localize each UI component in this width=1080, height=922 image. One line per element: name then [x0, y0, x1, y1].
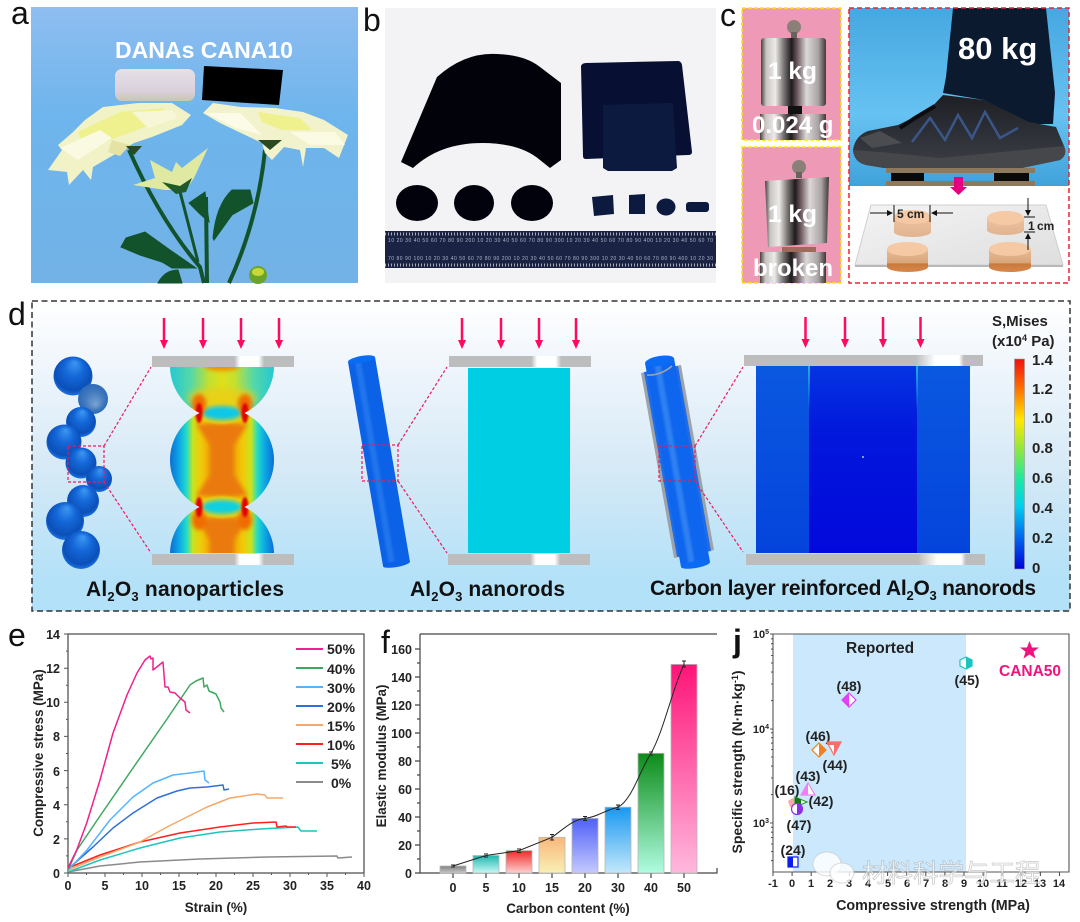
caption nanorods: Al: [410, 578, 431, 601]
y axis title j: ): [729, 670, 745, 675]
x tick labels j: 1: [808, 878, 814, 890]
y tick labels f: 160: [391, 643, 412, 657]
panel d: finite element stress simulations: [32, 301, 1070, 611]
x tick labels j: 11: [996, 878, 1008, 890]
label broken: broken: [753, 255, 833, 282]
stems and leaves: [121, 150, 265, 283]
bars f: [440, 664, 697, 873]
y tick labels f: 60: [398, 783, 412, 797]
panel label f: f: [381, 624, 390, 660]
x axis title f: Carbon content (%): [506, 901, 630, 916]
stress colour bar: 1.2: [1032, 381, 1053, 398]
y tick labels f: [391, 643, 412, 881]
x tick labels j: 13: [1034, 878, 1046, 890]
magenta arrow: [950, 177, 967, 195]
nanoparticle stress map: [170, 367, 274, 553]
left flower: [48, 103, 191, 185]
y tick labels e: 2: [53, 833, 60, 847]
y tick labels j: 5: [765, 629, 769, 636]
legend e: 15%: [327, 718, 356, 734]
legend e: 20%: [327, 699, 356, 715]
round samples: [396, 185, 553, 221]
y tick labels f: 40: [398, 811, 412, 825]
x tick labels j: 12: [1015, 878, 1027, 890]
y axis title j: Specific strength (N·m·kg: [729, 683, 745, 854]
dimension 1 cm: [1024, 198, 1054, 250]
x tick labels j: 8: [942, 878, 948, 890]
carbon coated nanorod: [641, 354, 714, 570]
stress colour bar: [992, 313, 1055, 577]
marker 45: (45): [955, 672, 979, 688]
x tick labels e: [65, 879, 371, 893]
glass plate schematic: [855, 205, 1063, 265]
y tick labels e: 12: [46, 662, 60, 676]
sample names: DANAs CANA10: [115, 37, 293, 63]
y tick labels f: 100: [391, 727, 412, 741]
panel c: 1 kg weight on sample: [742, 8, 841, 140]
watermark text: 材料科学与工程: [862, 860, 1041, 888]
label sample mass: 0.024 g: [752, 112, 833, 139]
small flower: [133, 148, 208, 194]
marker 16: (16): [775, 782, 799, 798]
compression plates for coated nanorod: [744, 355, 985, 565]
x axis title j: Compressive strength (MPa): [836, 898, 1030, 914]
marker 44: (44): [823, 757, 847, 773]
x tick labels f: 20: [578, 881, 592, 895]
panel c: weight breaking control sample: [742, 147, 841, 283]
x tick labels j: -1: [768, 878, 778, 890]
x tick labels j: [768, 878, 1066, 890]
y tick labels j: 10: [753, 818, 765, 830]
y tick labels j: 3: [765, 818, 769, 825]
caption nanoparticles: 3: [131, 589, 139, 604]
caption nanorods: O: [439, 578, 455, 601]
caption carbon reinforced nanorods: O: [913, 577, 930, 600]
y tick labels e: 6: [53, 765, 60, 779]
x tick labels f: 10: [512, 881, 526, 895]
legend e: 30%: [327, 680, 356, 696]
legend e: 50%: [327, 641, 356, 657]
stress colour bar: 0.4: [1032, 500, 1054, 517]
large square sample: [581, 61, 692, 159]
x tick labels f: 15: [545, 881, 559, 895]
x tick labels j: 2: [827, 878, 833, 890]
caption nanoparticles: Al: [86, 578, 107, 601]
stress colour bar: 0.6: [1032, 470, 1053, 487]
small square sample: [603, 103, 677, 171]
dimension 1 cm: 1: [1028, 219, 1035, 233]
x tick labels j: 9: [961, 878, 967, 890]
compression plates for nanoparticles: [152, 356, 294, 565]
y tick labels j: 10: [753, 629, 765, 641]
x tick labels j: 0: [789, 878, 795, 890]
x tick labels f: 50: [677, 881, 691, 895]
x tick labels j: 10: [977, 878, 989, 890]
x tick labels f: [450, 881, 691, 895]
marker 44: [823, 742, 847, 773]
shoe: [853, 95, 1065, 168]
axes e: [64, 634, 364, 877]
x tick labels e: 15: [172, 879, 186, 893]
x axis title e: Strain (%): [185, 900, 247, 915]
pressure arrows for nanoparticles: [160, 318, 283, 349]
y tick labels e: [46, 628, 60, 881]
legend e: 0%: [331, 775, 352, 791]
x tick labels e: 30: [283, 879, 297, 893]
reported label: Reported: [846, 640, 914, 657]
x tick labels f: 40: [644, 881, 658, 895]
axes f: [415, 634, 717, 878]
x tick labels j: 3: [846, 878, 852, 890]
peach cylinders: [887, 210, 1031, 272]
x tick labels e: 5: [102, 879, 109, 893]
label 80 kg: 80 kg: [958, 31, 1037, 66]
x tick labels e: 20: [209, 879, 223, 893]
reported region: [793, 634, 966, 872]
marker 48: [837, 678, 861, 707]
y tick labels j: [753, 629, 769, 830]
x tick labels j: 4: [865, 878, 872, 890]
ruler: [385, 231, 716, 268]
ruler: 70 80 90 100 10 20 30 40 50 60 70 80 90 200 10 20 30 40 50 60 70 80 90 300 10 20 30 40 50 60 70 80 90 400 10 20 30: [388, 256, 713, 262]
y tick labels e: 8: [53, 730, 60, 744]
y tick labels f: 20: [398, 839, 412, 853]
panel f: elastic modulus bar chart: [374, 634, 717, 916]
panel j: specific strength versus compressive strength scatter: [729, 629, 1069, 914]
y axis title j: -1: [730, 675, 740, 683]
x tick labels e: 10: [135, 879, 149, 893]
x tick labels f: 30: [611, 881, 625, 895]
caption nanorods: 3: [455, 589, 462, 604]
marker 46: (46): [806, 728, 830, 744]
pressure arrows for coated nanorod: [802, 317, 924, 348]
label 1 kg: 1 kg: [768, 58, 817, 85]
legend e: [296, 641, 356, 791]
CANA50 star marker: [1020, 641, 1039, 658]
x tick labels e: 25: [246, 879, 260, 893]
marker 43: [796, 768, 820, 795]
DANAs disc: [115, 69, 195, 101]
stress colour bar: (x10: [992, 333, 1022, 350]
y tick labels f: 140: [391, 671, 412, 685]
marker 48: (48): [837, 678, 861, 694]
panel e: compressive stress-strain chart: [31, 628, 371, 915]
caption carbon reinforced nanorods: nanorods: [937, 577, 1036, 600]
ruler: 10 20 30 40 50 60 70 80 90 200 10 20 30 40 50 60 70 80 90 300 10 20 30 40 50 60 70 80 90 400 10 20 30 40 50 60 70: [388, 238, 713, 244]
marker 16: [775, 782, 799, 807]
caption nanoparticles: O: [115, 578, 131, 601]
y tick labels e: 10: [46, 696, 60, 710]
small samples: [592, 194, 709, 216]
x tick labels j: 14: [1053, 878, 1066, 890]
x tick labels j: 5: [885, 878, 891, 890]
marker 47: [787, 804, 811, 833]
pressure arrows for nanorod: [458, 318, 580, 349]
stress colour bar: 1.0: [1032, 410, 1053, 427]
panel label e: e: [8, 617, 26, 653]
stress colour bar: 0: [1032, 560, 1040, 577]
stress colour bar: 0.2: [1032, 530, 1053, 547]
stress colour bar: 0.8: [1032, 440, 1053, 457]
nanoparticle chain: [46, 356, 112, 569]
panel a: flowers supporting aerogels photo: [31, 7, 358, 284]
marker 45: [955, 657, 979, 688]
wooden plates and samples under shoe: [886, 168, 1035, 186]
zoom box and callout lines for nanorod: [362, 367, 447, 553]
dimension 5 cm: [870, 205, 953, 222]
panel b: shaped samples photo: [385, 8, 716, 283]
trouser leg: [943, 8, 1055, 124]
caption nanorods: 2: [431, 589, 438, 604]
legend e: 5%: [331, 756, 352, 772]
marker 42: (42): [809, 793, 833, 809]
x tick labels e: 0: [65, 879, 72, 893]
y tick labels f: 0: [405, 867, 412, 881]
zoom box and callout lines for coated nanorod: [659, 367, 743, 552]
marker 24: (24): [781, 842, 805, 858]
flower bud: [249, 266, 267, 284]
caption carbon reinforced nanorods: 3: [930, 588, 937, 603]
y tick labels e: 0: [53, 867, 60, 881]
compression plates for nanorod: [448, 356, 591, 565]
panel label b: b: [363, 2, 381, 38]
stress colour bar: S,Mises: [992, 313, 1048, 330]
stress colour bar: 4: [1022, 333, 1027, 343]
label 1 kg: 1 kg: [768, 201, 817, 228]
zoom box and callout lines for nanoparticles: [68, 367, 151, 553]
x tick labels f: 5: [483, 881, 490, 895]
caption nanorods: nanorods: [462, 578, 565, 601]
caption nanoparticles: 2: [107, 589, 115, 604]
marker 47: (47): [787, 817, 811, 833]
stress colour bar: 1.4: [1032, 352, 1054, 369]
dimension 1 cm: cm: [1037, 219, 1054, 233]
stress colour bar: Pa): [1027, 333, 1055, 350]
legend e: 10%: [327, 737, 356, 753]
marker 43: (43): [796, 768, 820, 784]
curved sample: [401, 54, 561, 168]
caption nanoparticles: nanoparticles: [139, 578, 284, 601]
marker 46: [806, 728, 830, 757]
y tick labels j: 4: [765, 724, 769, 731]
axes j: [770, 634, 1069, 876]
x tick labels f: 0: [450, 881, 457, 895]
panel label j: j: [732, 623, 742, 659]
y tick labels j: 10: [753, 724, 765, 736]
CANA50 label: CANA50: [999, 663, 1061, 680]
coated nanorod stress map: [756, 366, 970, 553]
x tick labels j: 6: [904, 878, 910, 890]
legend e: 40%: [327, 661, 356, 677]
nanorod stress map: [468, 368, 570, 553]
x tick labels e: 40: [357, 879, 371, 893]
watermark logo: [813, 852, 854, 883]
y tick labels f: 80: [398, 755, 412, 769]
caption carbon reinforced nanorods: Carbon layer reinforced Al: [650, 577, 907, 600]
single nanorod: [347, 354, 411, 569]
panel label d: d: [8, 296, 26, 332]
x tick labels e: 35: [320, 879, 334, 893]
curves e: [68, 656, 352, 872]
x tick labels j: 7: [923, 878, 929, 890]
CANA10 disc: [202, 66, 283, 105]
y axis title e: Compressive stress (MPa): [31, 669, 46, 837]
panel c: 80 kg person stands on samples: [849, 8, 1069, 283]
marker 24: [781, 842, 805, 867]
y tick labels e: 4: [53, 799, 60, 813]
y axis title f: Elastic modulus (MPa): [374, 685, 389, 827]
right flower: [203, 103, 348, 167]
y tick labels e: 14: [46, 628, 60, 642]
marker 42: [795, 793, 833, 809]
caption carbon reinforced nanorods: 2: [906, 588, 914, 603]
dimension 5 cm: 5 cm: [897, 207, 924, 221]
trend line with error bars f: [451, 661, 686, 867]
y tick labels f: 120: [391, 699, 412, 713]
